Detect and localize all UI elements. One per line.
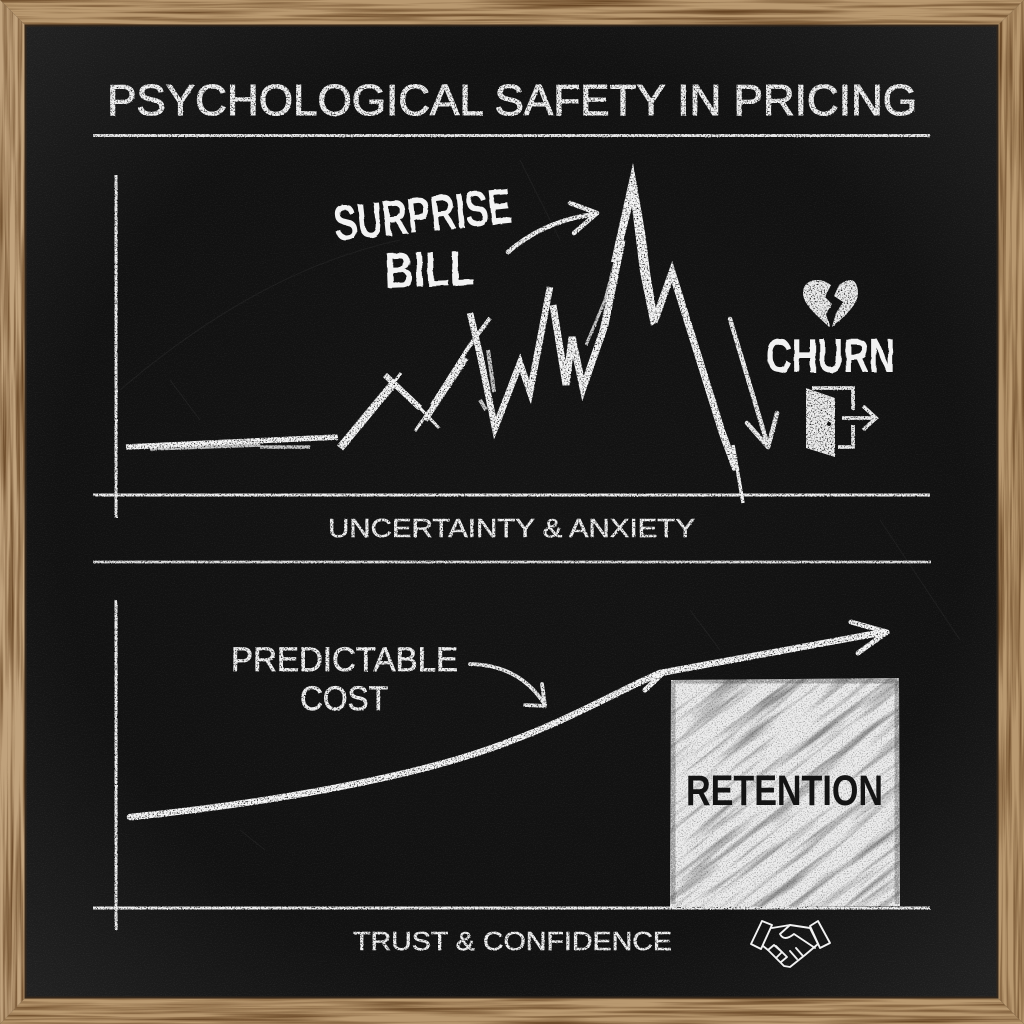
arrow: downward (730, 319, 777, 447)
label: predictable cost: COST (300, 680, 388, 718)
panel: trust and confidence (93, 600, 930, 968)
title underline (93, 134, 930, 137)
label: surprise bill: SURPRISE (331, 178, 514, 252)
icon: broken heart (803, 280, 858, 327)
panel divider (93, 561, 931, 563)
retention block (670, 678, 900, 907)
caption: uncertainty and anxiety: UNCERTAINTY & ANXIETY (328, 513, 695, 543)
label: surprise bill: BILL (383, 240, 475, 299)
label: churn: CHURN (766, 329, 895, 382)
volatile price line (126, 163, 743, 503)
arrowheads (645, 622, 887, 690)
label: retention: RETENTION (686, 767, 883, 815)
arrow: to peak (508, 203, 597, 252)
caption: trust and confidence: TRUST & CONFIDENCE (353, 926, 672, 956)
label: surprise bill (331, 178, 514, 299)
label: predictable cost (231, 641, 458, 718)
label: predictable cost: PREDICTABLE (231, 641, 458, 679)
chart axes: top (93, 175, 930, 518)
title: PSYCHOLOGICAL SAFETY IN PRICING (107, 76, 917, 125)
panel: uncertainty and anxiety (93, 163, 930, 543)
chart axes: bottom (93, 600, 930, 930)
steady growth curve (130, 632, 884, 817)
arrow: to curve (470, 664, 545, 706)
icon: handshake (751, 921, 830, 967)
icon: exit door (806, 388, 876, 457)
